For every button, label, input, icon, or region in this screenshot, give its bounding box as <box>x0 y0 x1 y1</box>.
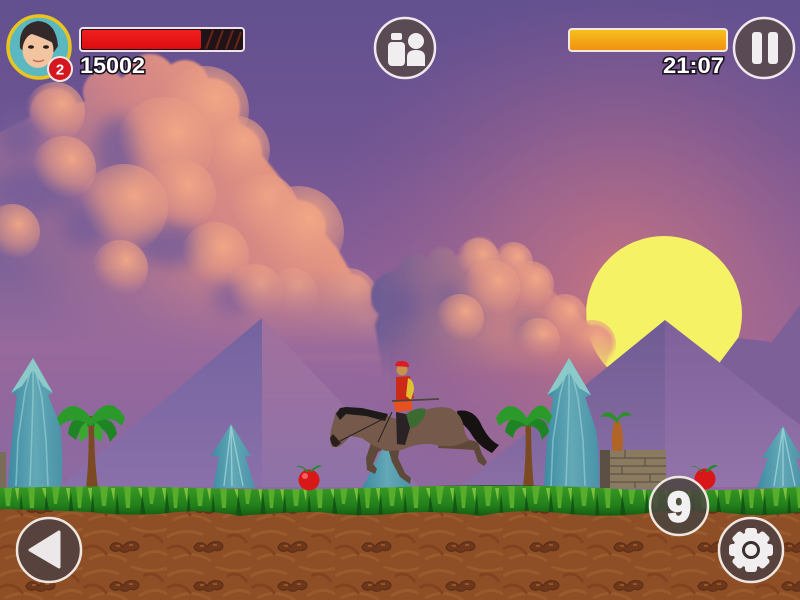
stone block platform <box>600 450 666 488</box>
counter button: nine <box>650 477 708 535</box>
tree: tall crystal pine <box>544 358 599 488</box>
sun <box>586 236 742 392</box>
ground: grass strip <box>0 485 800 516</box>
cloud shadows <box>0 111 252 320</box>
tree: crystal pine far right <box>757 426 800 488</box>
pickup: tomato centre <box>296 465 322 490</box>
horse body <box>330 407 470 451</box>
lance <box>392 399 439 401</box>
reins <box>340 412 392 442</box>
small palm on platform <box>602 413 631 451</box>
button: pause <box>734 18 794 78</box>
health bar <box>80 28 244 51</box>
cloud: large left cloud <box>0 54 390 418</box>
rider leg <box>396 412 410 445</box>
horse tail <box>457 410 499 453</box>
timer: 21:07 <box>663 53 724 78</box>
pickup: tomato right <box>691 465 718 490</box>
palm tree centre <box>496 405 552 488</box>
saddle blanket <box>402 408 426 428</box>
button: settings gear <box>719 518 783 582</box>
tree: crystal pine behind horse <box>362 445 412 488</box>
lives badge: 2 <box>56 62 64 78</box>
counter button: nine: 9 <box>667 483 691 530</box>
tree: crystal pine far left <box>8 358 62 488</box>
energy bar <box>569 29 727 51</box>
rider torso <box>396 376 414 404</box>
mountains: left range <box>60 318 420 487</box>
palm tree left <box>57 405 125 488</box>
lives badge <box>48 57 72 81</box>
mountains: right range <box>460 305 800 487</box>
score: 15002 <box>80 53 145 78</box>
cloud: centre right cloud <box>371 237 616 385</box>
cloud lit puffs <box>0 66 384 348</box>
tree: small crystal pine <box>211 424 255 488</box>
button: inventory <box>375 18 435 78</box>
horse legs <box>366 440 487 484</box>
cloud shadows <box>380 282 544 342</box>
player avatar <box>8 16 70 78</box>
ground: soil <box>0 505 800 600</box>
horse muzzle <box>330 434 341 447</box>
stone block edge far left <box>0 452 6 488</box>
horse mane <box>336 407 388 421</box>
rider helmet <box>395 361 409 367</box>
rider head <box>396 364 408 376</box>
player: horse and rider <box>330 361 499 484</box>
button: back arrow <box>17 518 81 582</box>
cloud lit puffs <box>436 238 616 368</box>
